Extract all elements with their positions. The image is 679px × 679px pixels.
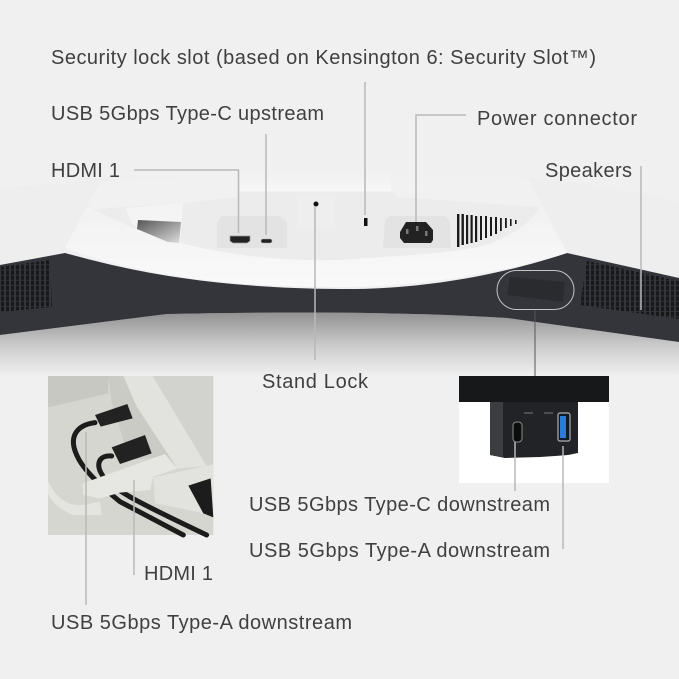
inset photo: cable routing	[48, 376, 213, 535]
label: HDMI 1 lower: HDMI 1	[144, 563, 213, 585]
inset: USB side ports	[459, 376, 609, 483]
stand neck	[240, 170, 391, 191]
button outline	[497, 270, 574, 310]
back wall	[48, 376, 108, 407]
label: USB-C downstream: USB 5Gbps Type-C downstream	[249, 494, 550, 516]
lower cable plug	[112, 435, 152, 464]
port block	[490, 402, 578, 458]
USB-C port	[513, 422, 522, 442]
security slot	[364, 218, 368, 226]
label: stand lock: Stand Lock	[262, 371, 369, 393]
power pins	[406, 226, 428, 236]
USB-C upstream leader	[265, 134, 267, 235]
black power plug	[188, 478, 213, 517]
rear vent	[457, 214, 517, 247]
USB-A blue insert	[560, 416, 566, 438]
label: USB-A downstream right: USB 5Gbps Type-A downstream	[249, 540, 550, 562]
monitor rear view	[0, 168, 679, 376]
shadow below monitor	[0, 313, 679, 376]
HDMI 1 leader	[134, 170, 238, 233]
speakers leader	[640, 166, 642, 310]
cable hook	[48, 481, 102, 515]
HDMI port	[230, 236, 250, 243]
upper cable plug	[95, 404, 133, 427]
photo USB-A leader	[85, 432, 87, 605]
cables	[73, 423, 207, 535]
white cable cover	[83, 454, 177, 498]
black bar	[459, 376, 609, 402]
USB-A downstream leader	[562, 446, 564, 549]
label: USB-C upstream: USB 5Gbps Type-C upstream	[51, 103, 324, 125]
leader lines	[86, 82, 641, 605]
left speaker vent	[0, 260, 52, 312]
power connector leader	[416, 115, 466, 222]
rear button	[507, 277, 565, 302]
left recess shadow	[137, 220, 181, 243]
port recess	[108, 376, 177, 469]
light strip	[123, 376, 207, 469]
stand lock hole	[314, 202, 318, 206]
right back shell	[520, 176, 679, 278]
USB-C port	[261, 239, 272, 243]
photo HDMI leader	[133, 480, 135, 575]
port block side	[490, 402, 503, 457]
label: speakers: Speakers	[545, 160, 632, 182]
right speaker vent	[580, 261, 679, 319]
USB-A port	[558, 413, 570, 441]
recessed port area	[93, 192, 540, 260]
power connector	[400, 222, 433, 243]
left back shell	[0, 178, 110, 265]
port plate	[217, 216, 287, 248]
label: security slot: Security lock slot (based on Kensington 6: Security Slot™)	[51, 47, 596, 69]
inset white panel	[459, 376, 609, 483]
USB-C downstream leader	[514, 442, 516, 491]
stand foot	[153, 464, 213, 517]
label: USB-A downstream lower: USB 5Gbps Type-A downstream	[51, 612, 352, 634]
security slot leader	[364, 82, 366, 215]
textured panel	[153, 376, 213, 466]
dark bezel band	[0, 253, 679, 342]
photo base	[48, 376, 213, 535]
stand lock leader	[314, 206, 316, 360]
button to inset leader	[534, 310, 536, 376]
USB symbols	[524, 412, 553, 414]
stand lock block	[297, 197, 335, 229]
label: HDMI 1: HDMI 1	[51, 160, 120, 182]
left recess opening	[126, 203, 183, 245]
label: power connector: Power connector	[477, 108, 637, 130]
central rear housing	[65, 168, 567, 287]
power plate	[383, 216, 451, 248]
